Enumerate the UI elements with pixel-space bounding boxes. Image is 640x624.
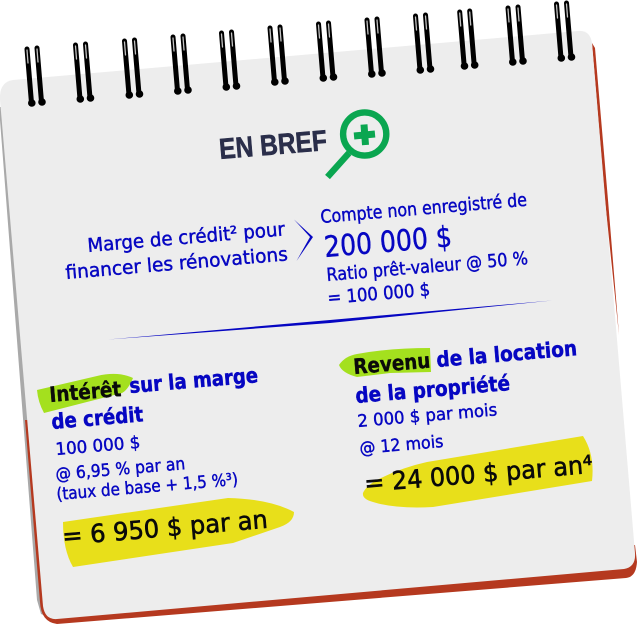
heading: rental income: Revenu (352, 349, 431, 379)
icon: magnifier with plus (328, 112, 386, 177)
text: rental calculation: @ 12 mois (359, 432, 444, 459)
icon: chevron arrow (294, 220, 313, 261)
spiral binding rings (27, 3, 575, 107)
panel: interest (37, 363, 294, 567)
text: credit line purpose: Marge de crédit² pour (87, 218, 286, 257)
text: interest calculation: 100 000 $ (55, 433, 141, 460)
text: interest calculation: @ 6,95 % par an (55, 454, 186, 485)
heading: rental income: de la propriété (354, 371, 511, 408)
text: non-registered account (320, 190, 529, 309)
title: EN BREF (218, 125, 328, 166)
text: rental calculation: 2 000 $ par mois (357, 400, 498, 432)
text: credit line purpose: financer les rénovations (65, 243, 289, 284)
heading: rental income (352, 336, 578, 408)
text: non-registered account: 200 000 $ (323, 219, 453, 264)
text: interest calculation (55, 433, 239, 505)
highlight: yellow revenue result (363, 436, 593, 507)
text: interest calculation: (taux de base + 1,5 %³) (56, 470, 239, 505)
highlight: green revenue (339, 348, 431, 377)
heading: interest on credit line: sur la marge (128, 363, 259, 398)
text: non-registered account: = 100 000 $ (327, 279, 431, 309)
text: rental calculation (357, 400, 498, 459)
panel: rental income (339, 336, 594, 507)
highlight: yellow interest result (63, 498, 294, 567)
heading: interest on credit line: Intérêt (48, 377, 122, 407)
text: non-registered account: Ratio prêt-valeur @ 50 % (326, 248, 529, 286)
highlight: green interest (37, 374, 133, 413)
heading: interest on credit line: de crédit (50, 402, 144, 434)
text: non-registered account: Compte non enregistré de (320, 190, 528, 228)
divider line (108, 300, 552, 340)
result: revenue per year: = 24 000 $ par an⁴ (363, 450, 594, 498)
heading: rental income: de la location (435, 336, 578, 372)
result: interest per year: = 6 950 $ par an (61, 505, 269, 551)
heading: interest on credit line (48, 363, 259, 434)
text: credit line purpose (65, 218, 289, 284)
